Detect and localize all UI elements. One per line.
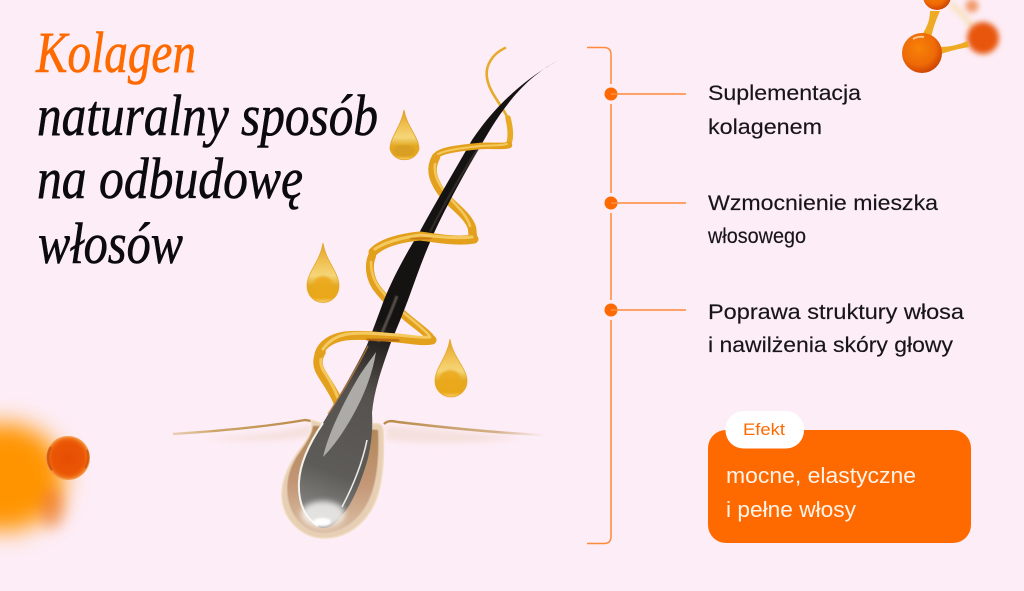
oil drop 3 <box>435 339 467 397</box>
panel: effect callout <box>708 411 971 543</box>
hair highlight <box>299 142 482 527</box>
step 1 text <box>708 81 861 139</box>
oil drop 1 <box>390 110 419 160</box>
connector 2 <box>604 196 686 210</box>
effect text <box>726 463 916 522</box>
step 2 text: Wzmocnienie mieszka <box>708 191 938 215</box>
title line 3: włosów <box>38 211 183 276</box>
skin line left <box>173 420 312 441</box>
title line 1: naturalny sposób <box>37 83 378 148</box>
step 2 text: włosowego <box>707 224 806 248</box>
effect label pill <box>726 411 804 448</box>
title highlight: Kolagen: Kolagen <box>35 20 196 85</box>
step 1 text: Suplementacja <box>708 81 861 105</box>
collagen ribbon behind hair <box>318 48 510 402</box>
follicle <box>282 420 383 538</box>
effect label pill: Efekt <box>743 420 785 439</box>
icon: blurred orange glow with droplet, left <box>0 423 90 531</box>
step 2 text <box>707 191 938 248</box>
step 3 text <box>708 300 964 357</box>
effect text: mocne, elastyczne <box>726 463 916 488</box>
skin line right <box>384 421 545 443</box>
step 3 text: i nawilżenia skóry głowy <box>708 333 953 357</box>
connector 1 <box>604 88 686 100</box>
hair shaft <box>298 61 557 528</box>
effect text: i pełne włosy <box>726 497 856 522</box>
bracket with connector lines and dots <box>587 48 686 544</box>
connector 3 <box>604 304 686 316</box>
step 1 text: kolagenem <box>708 115 822 139</box>
illustration: hair follicle with collagen ribbon <box>173 48 557 538</box>
title <box>35 20 378 276</box>
collagen ribbon over hair <box>319 144 509 354</box>
title line 2: na odbudowę <box>37 146 303 211</box>
oil drop 2 <box>307 243 339 302</box>
step 3 text: Poprawa struktury włosa <box>708 300 964 324</box>
icon: collagen molecule, top right <box>902 0 999 73</box>
